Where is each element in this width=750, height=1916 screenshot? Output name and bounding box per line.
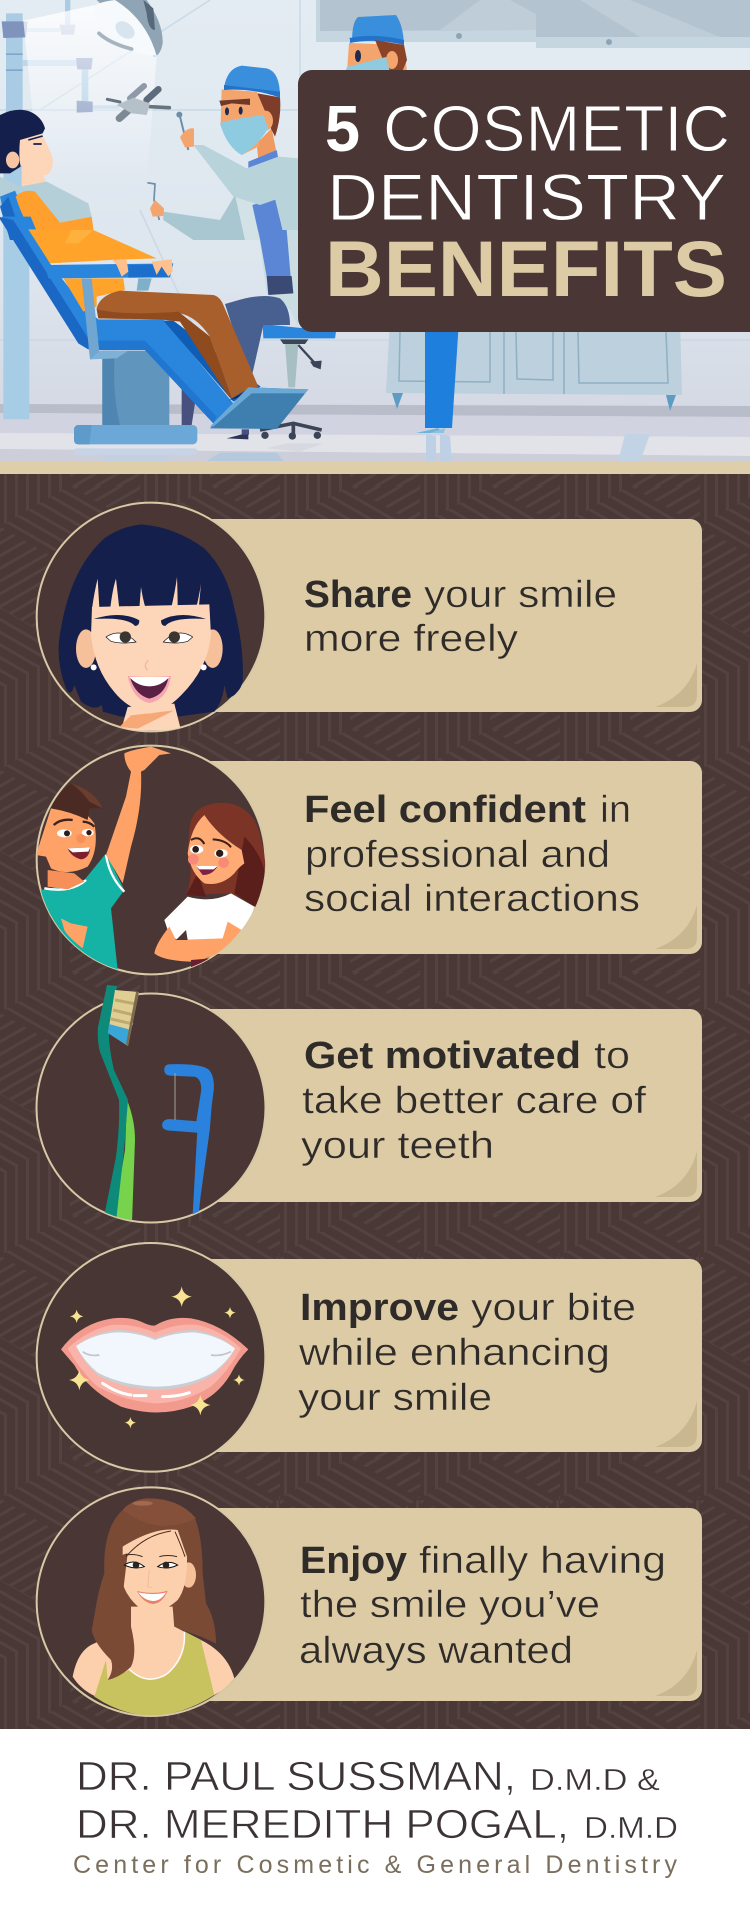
page curl — [655, 1151, 697, 1197]
wall and floor — [0, 0, 750, 462]
title line 2: DENTISTRY — [327, 160, 726, 234]
card text: the smile you’ve — [300, 1584, 600, 1626]
card text — [301, 1035, 646, 1167]
circle: man and woman high five — [36, 746, 266, 974]
benefit card 5 — [37, 1487, 702, 1716]
doctor 1: DR. PAUL SUSSMAN, — [76, 1753, 516, 1799]
instrument arms and column — [2, 0, 119, 419]
card text: Share — [304, 574, 412, 616]
card text: Get motivated — [304, 1035, 581, 1077]
card text: take better care of — [302, 1080, 646, 1122]
card text: Feel confident — [304, 789, 586, 831]
dental drill unit — [107, 86, 169, 118]
card text: Improve — [300, 1287, 459, 1329]
title line 3: BENEFITS — [325, 224, 727, 313]
page curl — [655, 663, 697, 707]
card text — [304, 789, 640, 920]
practice tagline: Center for Cosmetic & General Dentistry — [73, 1851, 678, 1879]
card panel — [150, 1009, 702, 1202]
ceiling cabinets — [316, 0, 750, 48]
card text: always wanted — [299, 1630, 573, 1672]
page curl — [655, 1401, 697, 1447]
card panel — [150, 1259, 702, 1452]
patterned benefits section — [0, 474, 750, 1729]
card panel — [150, 1508, 702, 1701]
card panel — [150, 519, 702, 712]
card text: social interactions — [304, 878, 640, 920]
footer: practice names — [73, 1753, 678, 1879]
circle: toothbrush and floss pick — [36, 985, 266, 1222]
card text: to — [594, 1035, 630, 1077]
doctor 2: DR. MEREDITH POGAL, — [76, 1801, 569, 1847]
card panel — [150, 761, 702, 954]
card text: Enjoy — [300, 1540, 407, 1582]
card text: your teeth — [301, 1125, 494, 1167]
title panel — [298, 70, 750, 332]
card text: your bite — [471, 1287, 636, 1329]
page curl — [655, 905, 697, 949]
card text: finally having — [419, 1540, 666, 1582]
dentist upper body — [147, 66, 298, 240]
circle: smiling woman — [37, 503, 265, 731]
hero illustration: dental office — [0, 0, 750, 474]
standing nurse — [345, 15, 459, 462]
card text — [299, 1540, 666, 1672]
card text: your smile — [298, 1377, 492, 1419]
page curl — [655, 1650, 697, 1696]
doctor 1: D.M.D & — [530, 1762, 660, 1797]
card text: in — [600, 789, 631, 831]
benefit card 1 — [37, 503, 702, 731]
base cabinet — [386, 320, 682, 462]
card text — [298, 1287, 636, 1419]
card text: more freely — [304, 618, 518, 660]
dental lamp — [23, 0, 163, 187]
circle: smiling woman in green top — [37, 1487, 265, 1716]
benefit card 2 — [36, 746, 702, 974]
circle: sparkling smile — [37, 1243, 265, 1472]
title line 1: 5 — [325, 92, 360, 165]
dental chair and lower bodies — [0, 217, 336, 462]
card text — [304, 574, 617, 660]
card text: your smile — [424, 574, 617, 616]
benefit card 3 — [36, 985, 702, 1222]
card text: while enhancing — [298, 1332, 610, 1374]
patient head and shirt — [0, 110, 95, 240]
benefit card 4 — [37, 1243, 702, 1472]
title line 1: COSMETIC — [383, 92, 730, 165]
card text: professional and — [305, 834, 610, 876]
doctor 2: D.M.D — [584, 1810, 678, 1845]
floor strip — [0, 461, 750, 474]
